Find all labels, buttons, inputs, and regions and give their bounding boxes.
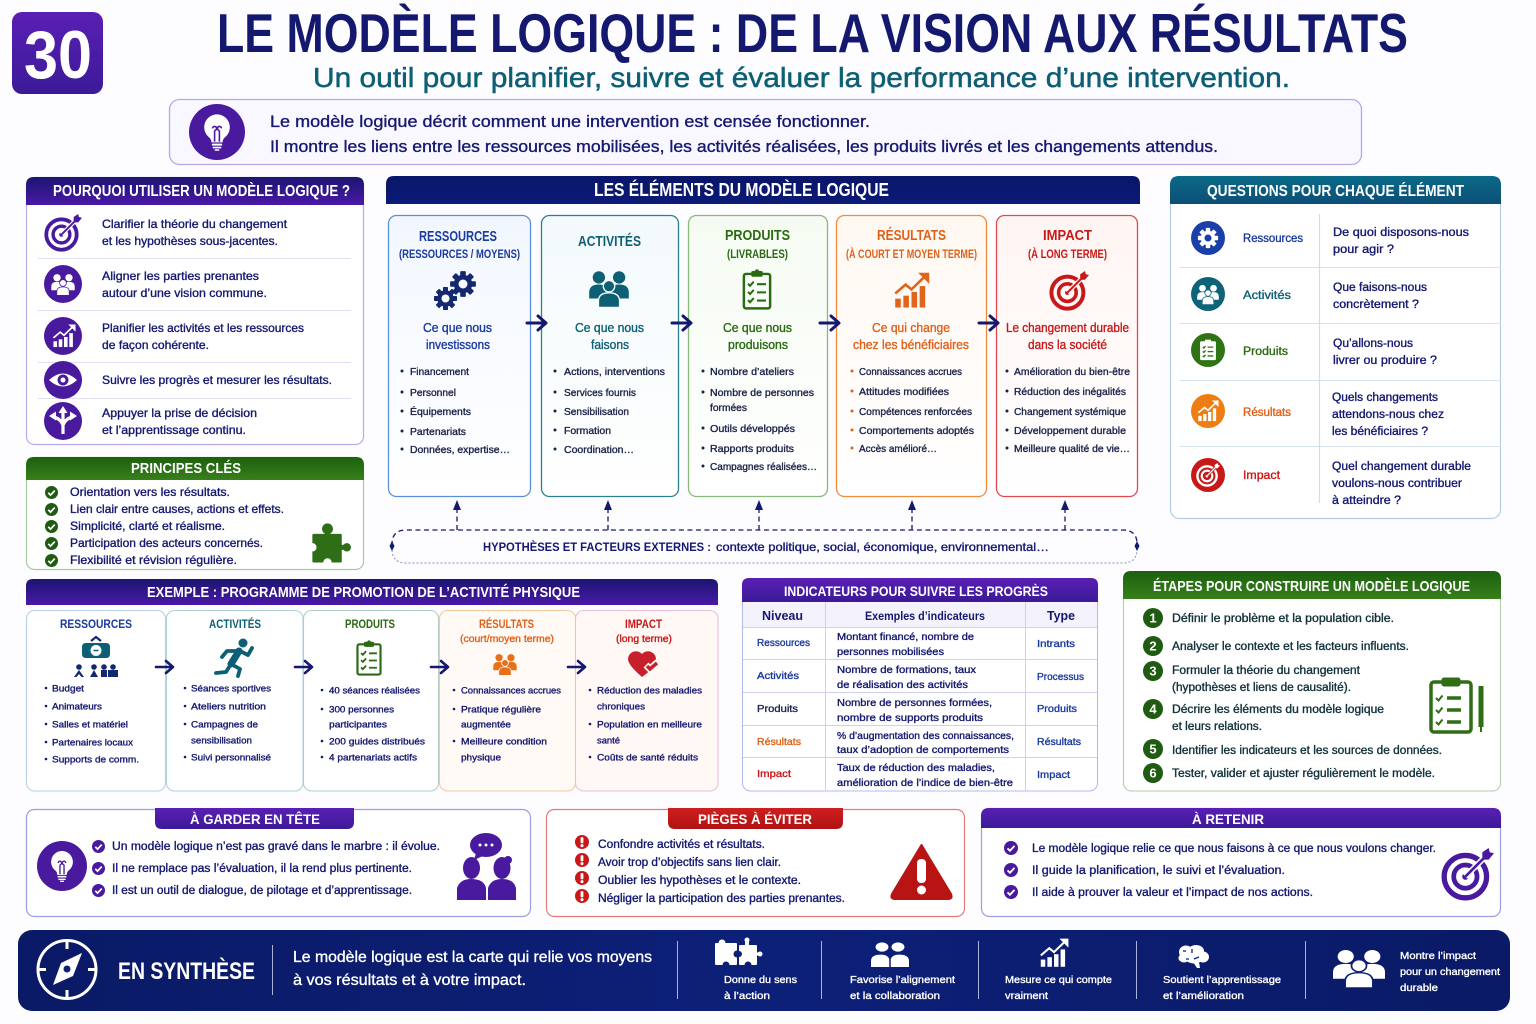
column: impact: dans la société — [1028, 338, 1107, 352]
panel: à retenir — [981, 808, 1501, 916]
item: alignement: Favorise l’alignement — [850, 974, 955, 986]
column: résultats: RÉSULTATS — [877, 227, 946, 244]
step texts: Définir le problème et la population cible. — [1172, 613, 1394, 625]
column: impact: Développement durable — [1014, 425, 1126, 437]
card: activités: ACTIVITÉS — [209, 616, 261, 631]
icon: money and team — [74, 637, 118, 677]
row: produits: Qu’allons-nous — [1333, 338, 1413, 350]
subtitle: Un outil pour planifier, suivre et évaluer la performance d’une intervention. — [313, 62, 1290, 93]
icon: heart — [628, 651, 658, 677]
column: ressources — [388, 216, 530, 496]
heading — [26, 177, 364, 205]
reason 5 — [102, 406, 257, 437]
card: impact: Réduction des maladies — [597, 686, 702, 696]
step texts: Formuler la théorie du changement — [1172, 665, 1361, 677]
step texts: Analyser le contexte et les facteurs influents. — [1172, 641, 1409, 653]
heading: ÉTAPES POUR CONSTRUIRE UN MODÈLE LOGIQUE — [1153, 578, 1470, 595]
column: activités: Actions, interventions — [564, 366, 665, 378]
card: résultats: physique — [461, 752, 501, 764]
icon: warning triangle — [891, 845, 952, 899]
takeaways: Le modèle logique relie ce que nous faisons à ce que nous voulons changer. — [1032, 843, 1436, 855]
column: résultats: Comportements adoptés — [859, 425, 974, 437]
panel: à garder en tête — [26, 808, 530, 916]
row: produits: livrer ou produire ? — [1333, 355, 1437, 367]
table: examples: % d’augmentation des connaissances, — [837, 730, 1014, 742]
card: résultats: Meilleure condition — [461, 736, 547, 748]
card: impact: chroniques — [597, 702, 645, 712]
item: mesure — [1005, 939, 1112, 1002]
table: levels: Impact — [757, 768, 791, 780]
reason 5: et l’apprentissage continu. — [102, 423, 246, 437]
table: examples: taux d’adoption de comportements — [837, 744, 1009, 756]
card: ressources — [26, 610, 166, 791]
column: ressources: Financement — [410, 366, 469, 378]
row: activités: concrètement ? — [1333, 299, 1419, 311]
row: activités: Que faisons-nous — [1333, 282, 1427, 294]
row: impact: Impact — [1243, 470, 1281, 482]
tab heading — [155, 808, 354, 829]
column: impact — [996, 216, 1138, 496]
row: ressources: De quoi disposons-nous — [1333, 227, 1469, 239]
column: produits: (LIVRABLES) — [727, 249, 788, 261]
icon: runner — [216, 638, 252, 676]
intro text: Il montre les liens entre les ressources mobilisées, les activités réalisées, les produits livrés et les changements attendus. — [270, 137, 1218, 156]
card: impact: (long terme) — [616, 634, 672, 645]
row: résultats — [1191, 392, 1444, 438]
item: sens — [715, 938, 797, 1002]
column: produits: Campagnes réalisées… — [710, 461, 817, 473]
row: impact: Quel changement durable — [1332, 461, 1471, 473]
column: activités — [542, 216, 678, 496]
step numbers — [1143, 608, 1163, 783]
takeaways: Il guide la planification, le suivi et l’évaluation. — [1032, 865, 1285, 877]
column: impact: Amélioration du bien-être — [1014, 366, 1130, 378]
principles list: Simplicité, clarté et réalisme. — [70, 519, 225, 533]
table: examples: de réalisation des activités — [837, 679, 968, 691]
item: sens: Donne du sens — [724, 974, 797, 986]
column: activités: faisons — [591, 338, 629, 352]
step texts — [1172, 613, 1442, 780]
icon: dialogue — [457, 833, 516, 900]
reason 1: et les hypothèses sous-jacentes. — [102, 234, 278, 248]
step numbers: 3 — [1149, 664, 1157, 679]
table header: Type — [1047, 608, 1075, 623]
step texts: et leurs relations. — [1172, 721, 1262, 733]
column: ressources: Données, expertise… — [410, 444, 510, 456]
card: impact: Coûts de santé réduits — [597, 752, 698, 764]
step numbers: 2 — [1149, 639, 1157, 654]
heading — [26, 579, 718, 605]
card: ressources: Supports de comm. — [52, 754, 139, 766]
step numbers: 5 — [1149, 742, 1157, 757]
table: levels: Ressources — [757, 637, 810, 649]
table: types — [1037, 638, 1084, 781]
row: activités: Activités — [1243, 290, 1291, 302]
icon: target — [1444, 848, 1494, 898]
column: impact: Changement systémique — [1014, 406, 1126, 418]
icon: target — [1051, 271, 1089, 309]
item: apprentissage — [1163, 945, 1281, 1002]
panel: étapes — [1123, 571, 1501, 791]
column: ressources: RESSOURCES — [419, 229, 497, 245]
dashed up arrows — [453, 500, 1069, 530]
item: apprentissage: Soutient l’apprentissage — [1163, 974, 1281, 986]
column: résultats: chez les bénéficiaires — [853, 338, 969, 352]
heading: POURQUOI UTILISER UN MODÈLE LOGIQUE ? — [53, 181, 350, 200]
hypotheses box: contexte politique, social, économique, environnemental… — [716, 540, 1049, 554]
step texts: Décrire les éléments du modèle logique — [1172, 704, 1384, 716]
table: examples: amélioration de l’indice de bien-être — [837, 777, 1013, 789]
pitfalls: Négliger la participation des parties prenantes. — [598, 893, 845, 905]
icon: compass — [38, 940, 96, 998]
column: produits: Nombre de personnes — [710, 387, 814, 399]
check icons — [1004, 841, 1018, 899]
heading: À RETENIR — [1192, 811, 1264, 827]
card: activités: sensibilisation — [191, 736, 252, 746]
heading — [1123, 571, 1501, 599]
tab heading: PIÈGES À ÉVITER — [698, 811, 812, 827]
row: ressources: Ressources — [1243, 233, 1303, 245]
summary text: Le modèle logique est la carte qui relie vos moyens — [293, 949, 652, 966]
step numbers: 1 — [1149, 611, 1157, 626]
heading: EN SYNTHÈSE — [118, 957, 255, 985]
row: résultats: les bénéficiaires ? — [1332, 426, 1428, 438]
icon: gears — [434, 271, 476, 310]
item: impact — [1333, 950, 1500, 994]
heading: QUESTIONS POUR CHAQUE ÉLÉMENT — [1207, 183, 1464, 200]
notes — [112, 841, 440, 897]
card: produits: 300 personnes — [329, 704, 394, 716]
column: résultats: Connaissances accrues — [859, 366, 962, 378]
table: types: Résultats — [1037, 736, 1081, 748]
summary text — [293, 949, 652, 989]
card: produits — [304, 610, 438, 791]
step texts: Identifier les indicateurs et les sources de données. — [1172, 745, 1442, 757]
table: examples: Nombre de personnes formées, — [837, 697, 992, 709]
panel: exemple — [26, 579, 718, 791]
heading — [742, 578, 1098, 602]
heading: INDICATEURS POUR SUIVRE LES PROGRÈS — [784, 583, 1048, 599]
icon: puzzle — [308, 523, 351, 567]
card: activités — [166, 610, 303, 791]
item: impact: durable — [1400, 982, 1438, 994]
column: produits — [688, 216, 828, 496]
reason 2 — [102, 269, 267, 300]
step texts: Tester, valider et ajuster régulièrement le modèle. — [1172, 768, 1435, 780]
row: ressources: pour agir ? — [1333, 244, 1394, 256]
table header: Exemples d’indicateurs — [865, 609, 985, 623]
intro box — [170, 100, 1362, 164]
panel: les éléments du modèle logique — [386, 176, 1140, 563]
column: impact: Le changement durable — [1006, 321, 1129, 335]
pitfalls: Oublier les hypothèses et le contexte. — [598, 875, 801, 887]
card: ressources: Salles et matériel — [52, 720, 128, 730]
check icons — [92, 840, 105, 897]
icon: people — [493, 654, 517, 675]
column: résultats: Ce qui change — [872, 321, 950, 335]
notes: Il est un outil de dialogue, de pilotage et d’apprentissage. — [112, 885, 412, 897]
warning marks — [575, 835, 589, 903]
pitfalls: Confondre activités et résultats. — [598, 839, 765, 851]
notes: Un modèle logique n’est pas gravé dans le marbre : il évolue. — [112, 841, 440, 853]
column: impact: Meilleure qualité de vie… — [1014, 443, 1130, 455]
table: types: Impact — [1037, 769, 1070, 781]
table: levels: Activités — [757, 670, 799, 682]
column: impact: Réduction des inégalités — [1014, 386, 1126, 398]
item: apprentissage: et l’amélioration — [1163, 990, 1244, 1002]
icon: light bulb — [37, 841, 87, 891]
row: résultats: Quels changements — [1332, 392, 1438, 404]
reason 3 — [102, 321, 304, 352]
heading: LES ÉLÉMENTS DU MODÈLE LOGIQUE — [594, 179, 889, 200]
panel: pièges à éviter — [546, 808, 964, 916]
icon: clipboard and pen — [1431, 678, 1481, 732]
icon: people — [589, 271, 629, 307]
icon: clipboard — [744, 269, 770, 308]
heading — [1170, 176, 1501, 204]
column: résultats — [836, 216, 986, 496]
card: résultats: Pratique régulière — [461, 704, 541, 716]
column: activités: ACTIVITÉS — [578, 233, 641, 250]
reason 3: de façon cohérente. — [102, 338, 209, 352]
pitfalls — [598, 839, 845, 905]
reason 5: Appuyer la prise de décision — [102, 406, 257, 420]
column: résultats: Accès amélioré… — [859, 443, 937, 455]
icon: people — [44, 265, 82, 303]
row: activités — [1191, 277, 1427, 311]
card: impact: IMPACT — [625, 617, 663, 631]
icon: directions — [44, 402, 82, 440]
card: produits: 200 guides distribués — [329, 736, 425, 748]
card: activités: Ateliers nutrition — [191, 702, 266, 712]
column: produits: Outils développés — [710, 423, 795, 435]
intro text: Le modèle logique décrit comment une intervention est censée fonctionner. — [270, 112, 870, 131]
principles list: Participation des acteurs concernés. — [70, 536, 263, 550]
column: ressources: Équipements — [410, 405, 471, 418]
card: résultats: Connaissances accrues — [461, 686, 561, 696]
item: alignement: et la collaboration — [850, 990, 940, 1002]
table: types: Produits — [1037, 703, 1077, 715]
item: impact: Montre l’impact — [1400, 950, 1476, 962]
card: impact — [576, 610, 718, 791]
row: impact: à atteindre ? — [1332, 495, 1401, 507]
reason 3: Planifier les activités et les ressources — [102, 321, 304, 335]
heading: PRINCIPES CLÉS — [131, 460, 241, 477]
card: résultats — [440, 610, 576, 791]
card: résultats: augmentée — [461, 720, 511, 730]
reason 4: Suivre les progrès et mesurer les résultats. — [102, 373, 332, 387]
column: activités: Coordination… — [564, 444, 634, 456]
intro text — [270, 112, 1218, 156]
table: examples: Nombre de formations, taux — [837, 664, 977, 676]
notes: Il ne remplace pas l’évaluation, il la rend plus pertinente. — [112, 863, 412, 875]
column: activités: Ce que nous — [575, 321, 644, 335]
item: mesure: Mesure ce qui compte — [1005, 974, 1112, 986]
column: impact: (À LONG TERME) — [1028, 248, 1107, 261]
item: impact: pour un changement — [1400, 966, 1500, 978]
column: produits: Ce que nous — [723, 321, 792, 335]
arrows between example cards — [156, 661, 585, 673]
column: ressources: Ce que nous — [423, 321, 492, 335]
row: impact — [1191, 458, 1471, 507]
table: examples: Montant financé, nombre de — [837, 631, 974, 643]
item: alignement — [850, 942, 955, 1002]
banner: en synthèse — [18, 930, 1510, 1011]
column: ressources: (RESSOURCES / MOYENS) — [399, 249, 520, 261]
column: produits: Rapports produits — [710, 443, 794, 455]
heading — [981, 808, 1501, 828]
table: levels: Produits — [757, 703, 798, 715]
panel: principes clés — [26, 457, 364, 570]
card: résultats: (court/moyen terme) — [460, 634, 554, 645]
icon: clipboard — [357, 640, 381, 675]
card: produits: PRODUITS — [345, 617, 395, 631]
card: ressources: RESSOURCES — [60, 617, 132, 631]
reason 2: autour d’une vision commune. — [102, 286, 267, 300]
takeaways — [1032, 843, 1436, 899]
card: résultats: RÉSULTATS — [479, 616, 534, 631]
panel: questions pour chaque élément — [1170, 176, 1501, 518]
column: produits: Nombre d’ateliers — [710, 366, 794, 378]
column: résultats: Attitudes modifiées — [859, 386, 949, 398]
column: résultats: Compétences renforcées — [859, 406, 972, 418]
column: résultats: (À COURT ET MOYEN TERME) — [846, 248, 977, 261]
table: types: Processus — [1037, 671, 1084, 683]
row: produits: Produits — [1243, 346, 1288, 358]
hypotheses box — [390, 530, 1140, 563]
row: résultats: Résultats — [1243, 407, 1291, 419]
heading: EXEMPLE : PROGRAMME DE PROMOTION DE L’ACTIVITÉ PHYSIQUE — [147, 584, 580, 601]
column: produits: produisons — [728, 338, 788, 352]
icon: light bulb — [189, 104, 245, 160]
card: activités: Campagnes de — [191, 720, 258, 730]
card: ressources: Animateurs — [52, 702, 102, 712]
card: impact: Population en meilleure — [597, 720, 702, 730]
panel: indicateurs — [742, 578, 1098, 791]
principles list: Orientation vers les résultats. — [70, 485, 230, 499]
table: types: Intrants — [1037, 638, 1075, 650]
tab heading: À GARDER EN TÊTE — [190, 810, 320, 827]
hypotheses box: HYPOTHÈSES ET FACTEURS EXTERNES : — [483, 539, 711, 554]
icon: eye — [44, 361, 82, 399]
table header — [743, 602, 1097, 627]
summary text: à vos résultats et à votre impact. — [293, 972, 526, 989]
principles list: Lien clair entre causes, actions et effets. — [70, 502, 284, 516]
takeaways: Il aide à prouver la valeur et l’impact de nos actions. — [1032, 887, 1313, 899]
card: ressources: Budget — [52, 684, 84, 694]
card: activités: Séances sportives — [191, 684, 271, 694]
arrows between columns — [527, 316, 998, 330]
table header: Niveau — [762, 608, 803, 623]
card: ressources: Partenaires locaux — [52, 738, 133, 748]
badge: number 30: 30 — [24, 17, 92, 93]
column: ressources: Partenariats — [410, 426, 466, 438]
icon: growth chart — [895, 273, 929, 308]
reason 2: Aligner les parties prenantes — [102, 269, 259, 283]
table: examples: nombre de supports produits — [837, 712, 983, 724]
step numbers: 6 — [1149, 766, 1157, 781]
principles list — [70, 485, 284, 567]
table: levels: Résultats — [757, 736, 801, 748]
principles list: Flexibilité et révision régulière. — [70, 553, 237, 567]
card: produits: participantes — [329, 720, 387, 730]
card: produits: 40 séances réalisées — [329, 686, 420, 696]
column: ressources: Personnel — [410, 387, 456, 399]
reason 1: Clarifier la théorie du changement — [102, 217, 288, 231]
column: activités: Sensibilisation — [564, 406, 629, 418]
heading — [386, 176, 1140, 204]
column: produits: formées — [710, 402, 747, 414]
table: levels — [757, 637, 810, 780]
panel: pourquoi utiliser un modèle logique — [26, 177, 364, 444]
column: produits: PRODUITS — [725, 228, 790, 244]
column: activités: Services fournis — [564, 387, 636, 399]
row: résultats: attendons-nous chez — [1332, 409, 1444, 421]
check icons — [45, 486, 58, 567]
tab heading — [668, 808, 843, 829]
card: produits: 4 partenariats actifs — [329, 752, 417, 764]
column: activités: Formation — [564, 425, 611, 437]
table: examples: personnes mobilisées — [837, 646, 944, 658]
column: ressources: investissons — [426, 338, 490, 352]
step numbers: 4 — [1149, 702, 1157, 717]
card: impact: santé — [597, 736, 620, 746]
row: ressources — [1191, 221, 1469, 256]
reason 1 — [102, 217, 288, 248]
icon: chart — [44, 317, 82, 355]
icon: target — [46, 214, 82, 250]
pitfalls: Avoir trop d’objectifs sans lien clair. — [598, 857, 781, 869]
column: impact: IMPACT — [1043, 228, 1092, 244]
row: impact: voulons-nous contribuer — [1332, 478, 1462, 490]
item: mesure: vraiment — [1005, 990, 1048, 1002]
card: activités: Suivi personnalisé — [191, 752, 271, 764]
item: sens: à l’action — [724, 990, 770, 1002]
step texts: (hypothèses et liens de causalité). — [1172, 682, 1351, 694]
table: examples — [837, 631, 1014, 789]
heading — [26, 457, 364, 480]
row: produits — [1191, 333, 1437, 367]
table: examples: Taux de réduction des maladies, — [837, 762, 995, 774]
